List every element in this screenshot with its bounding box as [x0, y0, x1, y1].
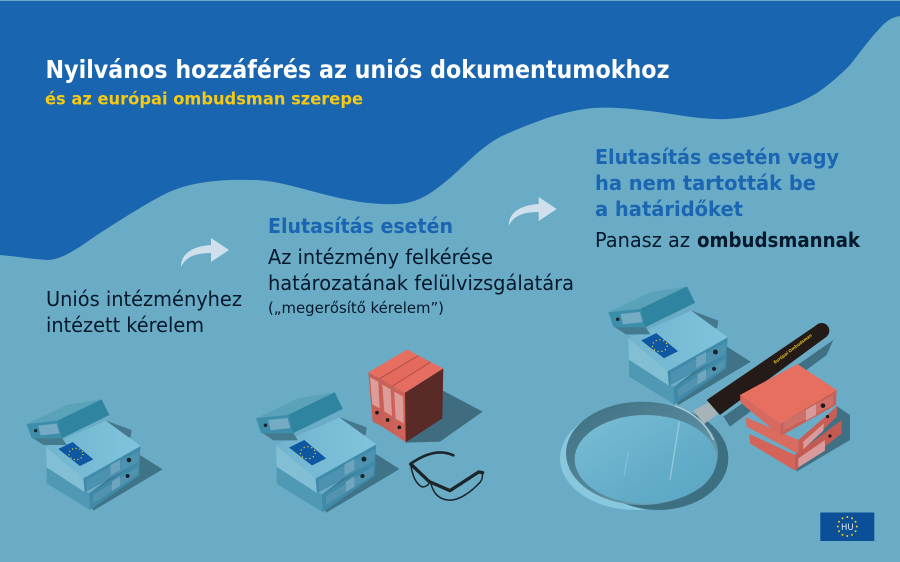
icon: EU flag with HU: HU	[841, 523, 854, 533]
illustration: red binder stack	[740, 364, 850, 472]
step 1 text: Uniós intézményhez	[46, 287, 242, 311]
step 2 heading: Elutasítás esetén	[268, 214, 453, 238]
illustration: binder stack 2	[256, 392, 400, 513]
illustration: glasses	[411, 452, 483, 500]
step 3 heading: a határidőket	[595, 197, 743, 221]
illustration: binder stack 1	[27, 399, 163, 511]
arrow 1	[181, 238, 229, 267]
step 1 text: intézett kérelem	[46, 313, 204, 337]
step 3 text	[595, 228, 861, 252]
subtitle: és az európai ombudsman szerepe	[45, 90, 363, 110]
illustration: binder stack 3	[608, 286, 751, 405]
icon: EU flag with HU	[820, 512, 874, 541]
illustration: magnifying glass	[560, 323, 833, 510]
illustration: red binders	[368, 349, 483, 443]
step 3 text: ombudsmannak	[697, 228, 861, 252]
step 2 text: határozatának felülvizsgálatára	[268, 271, 574, 295]
step 3 heading	[595, 145, 839, 221]
dark blue wave header	[0, 1, 900, 260]
step 2 text	[268, 245, 574, 317]
title: Nyilvános hozzáférés az uniós dokumentumokhoz	[46, 55, 670, 84]
step 3 text: Panasz az	[595, 228, 690, 252]
step 3 heading: ha nem tartották be	[595, 171, 816, 195]
step 3 heading: Elutasítás esetén vagy	[595, 145, 839, 169]
step 2 text: Az intézmény felkérése	[268, 245, 493, 269]
step 2 text: („megerősítő kérelem”)	[268, 299, 444, 317]
step 1 text	[46, 287, 242, 337]
illustration: magnifying glass: Európai Ombudsman	[772, 332, 813, 366]
arrow 2	[509, 197, 557, 226]
